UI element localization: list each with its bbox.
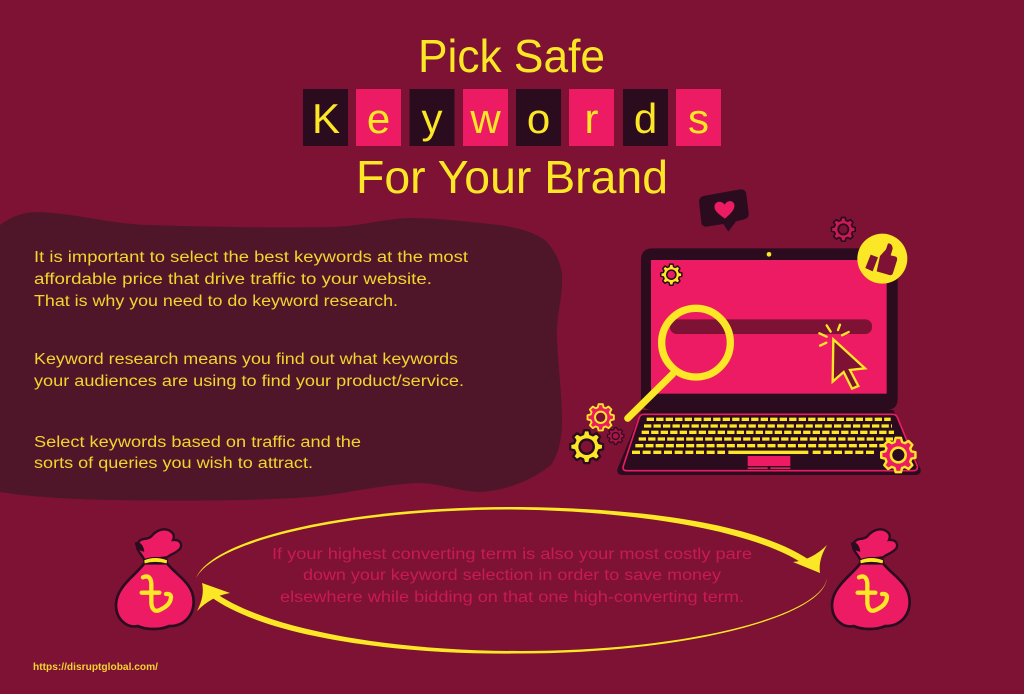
icon: screen gear — [661, 264, 682, 285]
icon: small dark gear — [607, 428, 624, 444]
panel: intro text blob — [0, 212, 562, 501]
arrow: top curve — [196, 507, 827, 578]
icon: keyboard gear — [881, 438, 915, 472]
icon: outline gear top — [831, 217, 855, 241]
text: paragraph 3: sorts of queries you wish to attract. — [34, 455, 313, 472]
text: paragraph 1: It is important to select the best keywords at the most — [34, 249, 469, 266]
text: paragraph 3: Select keywords based on traffic and the — [34, 434, 361, 451]
icon: thumbs up badge — [857, 234, 907, 284]
title: Keywords letter tiles: o — [527, 95, 550, 142]
illustration: laptop with magnifier — [570, 189, 921, 475]
laptop keyboard base — [617, 410, 921, 475]
title: Keywords letter tiles — [303, 89, 721, 146]
title: Keywords letter tiles: s — [688, 95, 709, 142]
text: bottom callout: down your keyword selection in order to save money — [303, 567, 721, 584]
keyboard keys — [632, 419, 895, 452]
laptop lid and screen — [641, 248, 898, 410]
text: paragraph 2: your audiences are using to find your product/service. — [34, 373, 464, 390]
icon: magnifying glass — [628, 308, 730, 418]
text: paragraph 2 — [34, 351, 464, 390]
icon: yellow gear — [570, 430, 603, 463]
icon: heart speech bubble — [699, 189, 749, 232]
text: bottom callout — [272, 546, 752, 606]
title: Keywords letter tiles: w — [469, 95, 501, 142]
text: paragraph 2: Keyword research means you find out what keywords — [34, 351, 458, 368]
text: paragraph 1: That is why you need to do keyword research. — [34, 293, 398, 310]
title: Keywords letter tiles: K — [312, 95, 340, 142]
text: paragraph 1 — [34, 249, 469, 310]
title: For Your Brand: For Your Brand — [356, 151, 668, 203]
text: source URL: https://disruptglobal.com/ — [33, 661, 158, 673]
text: paragraph 1: affordable price that drive traffic to your website. — [34, 271, 432, 288]
icon: pink gear — [587, 404, 614, 431]
title: Keywords letter tiles: r — [584, 95, 598, 142]
text: bottom callout: If your highest converting term is also your most costly pare — [272, 546, 752, 563]
icon: right money bag — [832, 529, 910, 629]
title: Pick Safe: Pick Safe — [418, 30, 605, 82]
arrow: bottom curve — [197, 578, 827, 654]
icon: mouse cursor — [819, 325, 865, 389]
text: paragraph 3 — [34, 434, 361, 472]
text: bottom callout: elsewhere while bidding on that one high-converting term. — [280, 589, 744, 606]
title: Keywords letter tiles: y — [422, 95, 442, 142]
icon: left money bag — [116, 529, 194, 629]
title: Keywords letter tiles: e — [367, 95, 390, 142]
title: Keywords letter tiles: d — [634, 95, 657, 142]
